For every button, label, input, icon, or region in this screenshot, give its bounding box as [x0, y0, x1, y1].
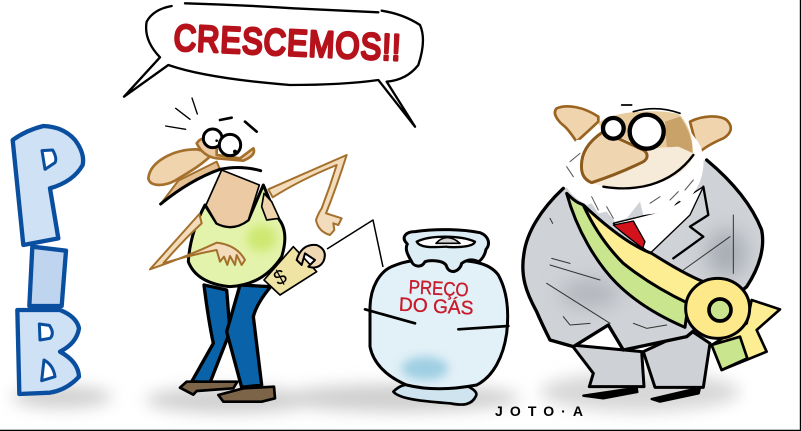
man with gas tag: [148, 98, 347, 402]
lower lip: [161, 162, 220, 204]
dollar sign: $: [270, 265, 291, 290]
PIB letters: [13, 126, 83, 394]
cylinder body: [370, 260, 508, 389]
surprise marks: [166, 98, 197, 129]
sash yellow band: [583, 205, 703, 303]
eyes: [203, 129, 222, 148]
forehead shade: [665, 117, 693, 153]
suit jacket: [523, 160, 763, 350]
signature: JOTO·A: [495, 403, 583, 419]
nose: [581, 132, 647, 183]
cylinder label line two: DO GÁS: [398, 293, 474, 320]
shirt: [188, 185, 285, 287]
shirt highlight: [247, 225, 277, 252]
beard: [563, 133, 704, 222]
nose: [148, 149, 213, 185]
cylinder highlight: [402, 357, 448, 380]
tie: [613, 221, 645, 248]
chest skin: [206, 170, 259, 227]
letter P: [13, 126, 83, 245]
speech bubble: [124, 3, 423, 127]
jacket outline: [523, 160, 763, 350]
shoulder: [262, 193, 279, 220]
arm behind: [268, 155, 347, 235]
shirt: [613, 187, 703, 253]
price tag: [264, 247, 317, 295]
speech text: CRESCEMOS!!: [173, 18, 403, 69]
cylinder collar: [404, 230, 488, 271]
bands: [365, 309, 508, 329]
gas cylinder: [365, 230, 508, 405]
cylinder base: [393, 384, 476, 405]
trousers: [572, 330, 710, 387]
jaw line: [161, 167, 261, 204]
shirt outline: [188, 185, 285, 287]
eyes: [603, 118, 624, 139]
shoes: [180, 382, 275, 402]
ribbon tails: [712, 300, 780, 370]
ears: [555, 106, 598, 142]
valve: [417, 237, 475, 247]
string to gas cylinder: [327, 220, 383, 267]
face: [197, 138, 254, 161]
ground shadows: [12, 372, 740, 413]
hand: [297, 245, 325, 268]
forehead: [598, 111, 693, 153]
cylinder label line one: PREÇO: [408, 277, 469, 301]
trousers: [192, 285, 271, 387]
hair line: [622, 105, 680, 113]
lapel and fold lines: [673, 187, 708, 258]
beard strokes: [567, 153, 693, 218]
front arm: [150, 214, 245, 269]
jacket shading: [560, 230, 747, 307]
sash green band: [567, 193, 688, 327]
rosette: [686, 278, 750, 338]
letter B: [17, 310, 79, 394]
cheek: [592, 147, 693, 188]
cylinder outline: [370, 260, 508, 389]
shoes: [583, 388, 700, 402]
letter I: [29, 247, 66, 306]
smile line: [603, 155, 693, 188]
president figure: [523, 105, 780, 402]
